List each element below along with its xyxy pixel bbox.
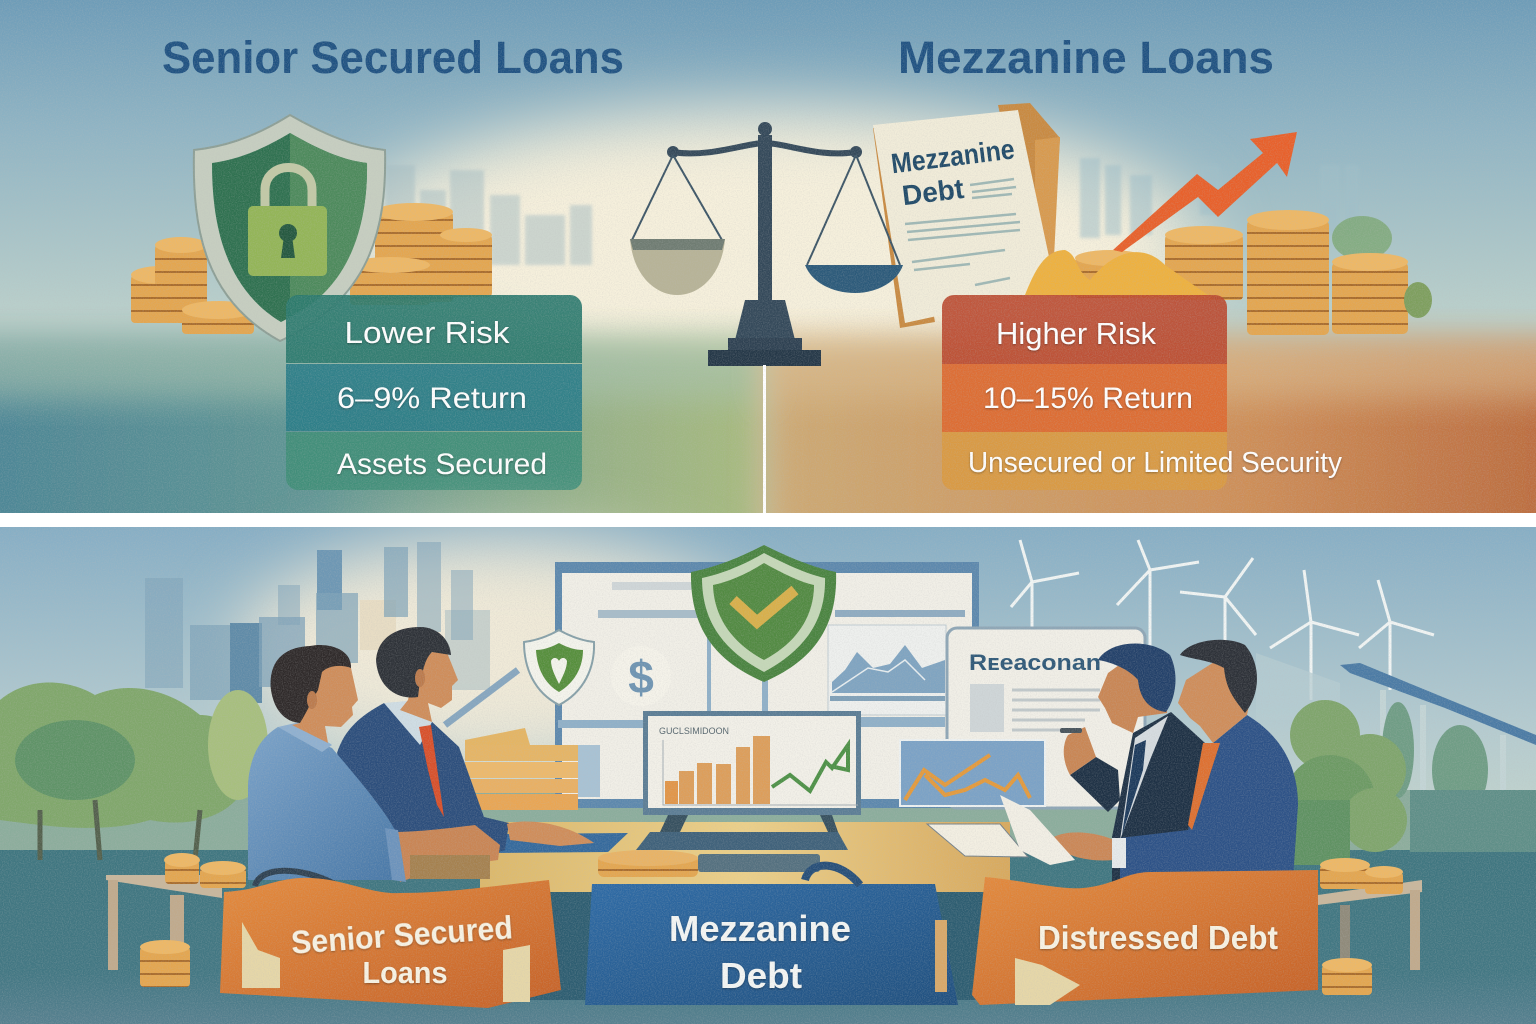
coin stacks: senior left	[131, 237, 254, 334]
document: Reeaconan report: Rᴇeaconan	[969, 650, 1101, 675]
person: man in dark suit gesturing	[1060, 644, 1210, 890]
panel: top comparison background	[0, 0, 1536, 575]
table: senior loan attributes	[286, 295, 582, 490]
text: senior secured loans	[290, 909, 514, 990]
bush: right side	[1404, 282, 1432, 318]
folder: Senior Secured Loans	[220, 878, 561, 1008]
chart: area chart on monitor	[828, 625, 946, 715]
chair back	[255, 871, 335, 886]
text: mezzanine debt: Debt	[900, 173, 966, 211]
dashboard: large back monitor	[555, 562, 979, 808]
text: senior secured loans: Loans	[362, 955, 448, 990]
icon: large green shield with check	[691, 545, 836, 682]
held paper	[1000, 795, 1075, 865]
trees: right	[1285, 700, 1536, 865]
icon: mezzanine debt document and folder	[873, 103, 1060, 328]
row: return: 6–9% Return	[337, 382, 527, 415]
person: man in navy suit with red tie	[337, 627, 594, 880]
row: lower risk	[286, 295, 582, 363]
wind turbines	[1011, 540, 1434, 700]
row: return	[942, 364, 1227, 432]
row: return	[286, 364, 582, 431]
row: assets secured: Assets Secured	[337, 448, 547, 481]
skyline: top right	[1080, 158, 1359, 238]
coin stacks: senior right	[350, 203, 492, 305]
text: mezzanine debt: Mezzanine	[889, 133, 1016, 179]
side table: left with coins	[106, 853, 246, 987]
text: mezzanine debt	[669, 908, 851, 996]
row: higher risk	[942, 295, 1227, 364]
icon: green shield with padlock	[194, 115, 385, 341]
chart: bars	[665, 736, 770, 804]
icon: padlock	[248, 168, 327, 276]
pointer bar to small shield	[445, 670, 518, 725]
icon: dollar sign	[611, 646, 671, 706]
row: higher risk: Higher Risk	[996, 316, 1156, 351]
person: man in blue suit with orange tie	[1049, 640, 1298, 880]
tab: folder handle	[805, 866, 860, 885]
front monitor with bar chart	[636, 711, 861, 850]
bridge	[1256, 653, 1536, 815]
person: casual man in blue shirt	[248, 645, 500, 882]
row: unsecured: Unsecured or Limited Security	[968, 447, 1342, 479]
icon: dollar sign: $	[628, 651, 654, 703]
row: unsecured	[942, 432, 1342, 490]
icon: balance scale	[630, 122, 903, 366]
chart: green trend line	[772, 745, 848, 791]
icon: building left	[242, 922, 280, 988]
trees: left	[0, 682, 268, 860]
desk pad	[698, 854, 820, 872]
icon: building right	[503, 945, 530, 1002]
row: lower risk: Lower Risk	[344, 315, 510, 350]
text: mezzanine debt	[889, 133, 1020, 212]
text: distressed debt: Distressed Debt	[1038, 919, 1278, 956]
side table: right with coins	[1318, 858, 1422, 995]
row: return: 10–15% Return	[983, 382, 1193, 415]
text: monitor heading: GUCLSIMIDOON	[659, 726, 729, 737]
desk front edge	[520, 892, 990, 1000]
row: assets secured	[286, 432, 582, 490]
text: mezzanine debt: Mezzanine	[669, 908, 851, 949]
blue folder on desk	[494, 833, 628, 853]
folder: Mezzanine Debt	[585, 866, 958, 1005]
text: mezzanine debt: Debt	[720, 955, 802, 996]
text: senior secured loans: Senior Secured	[290, 909, 514, 961]
title: Senior Secured Loans: Senior Secured Loans	[162, 32, 624, 83]
open binder on desk	[927, 824, 1028, 857]
table: mezzanine loan attributes	[942, 295, 1342, 490]
skyline: top left	[385, 165, 592, 270]
skyline: bottom left	[145, 542, 490, 703]
icon: document on folder	[1015, 958, 1080, 1005]
document: Reeaconan report	[947, 628, 1145, 808]
coin stacks: mezzanine	[1025, 210, 1408, 335]
chart: small orange line chart	[900, 740, 1045, 806]
divider: vertical	[763, 365, 766, 513]
title: Mezzanine Loans: Mezzanine Loans	[898, 32, 1274, 83]
wooden desk	[480, 822, 1010, 892]
icon: small shield with heart	[524, 630, 594, 705]
bush: behind coins	[1332, 216, 1392, 260]
arrow: rising orange trend	[1113, 132, 1297, 252]
divider: horizontal between panels	[0, 513, 1536, 527]
coin on desk	[598, 850, 698, 877]
stack: orange wood planks	[465, 728, 600, 810]
paper stack under hand	[410, 855, 490, 879]
panel: bottom scene background	[0, 527, 1536, 1024]
folder: Distressed Debt	[972, 870, 1318, 1005]
